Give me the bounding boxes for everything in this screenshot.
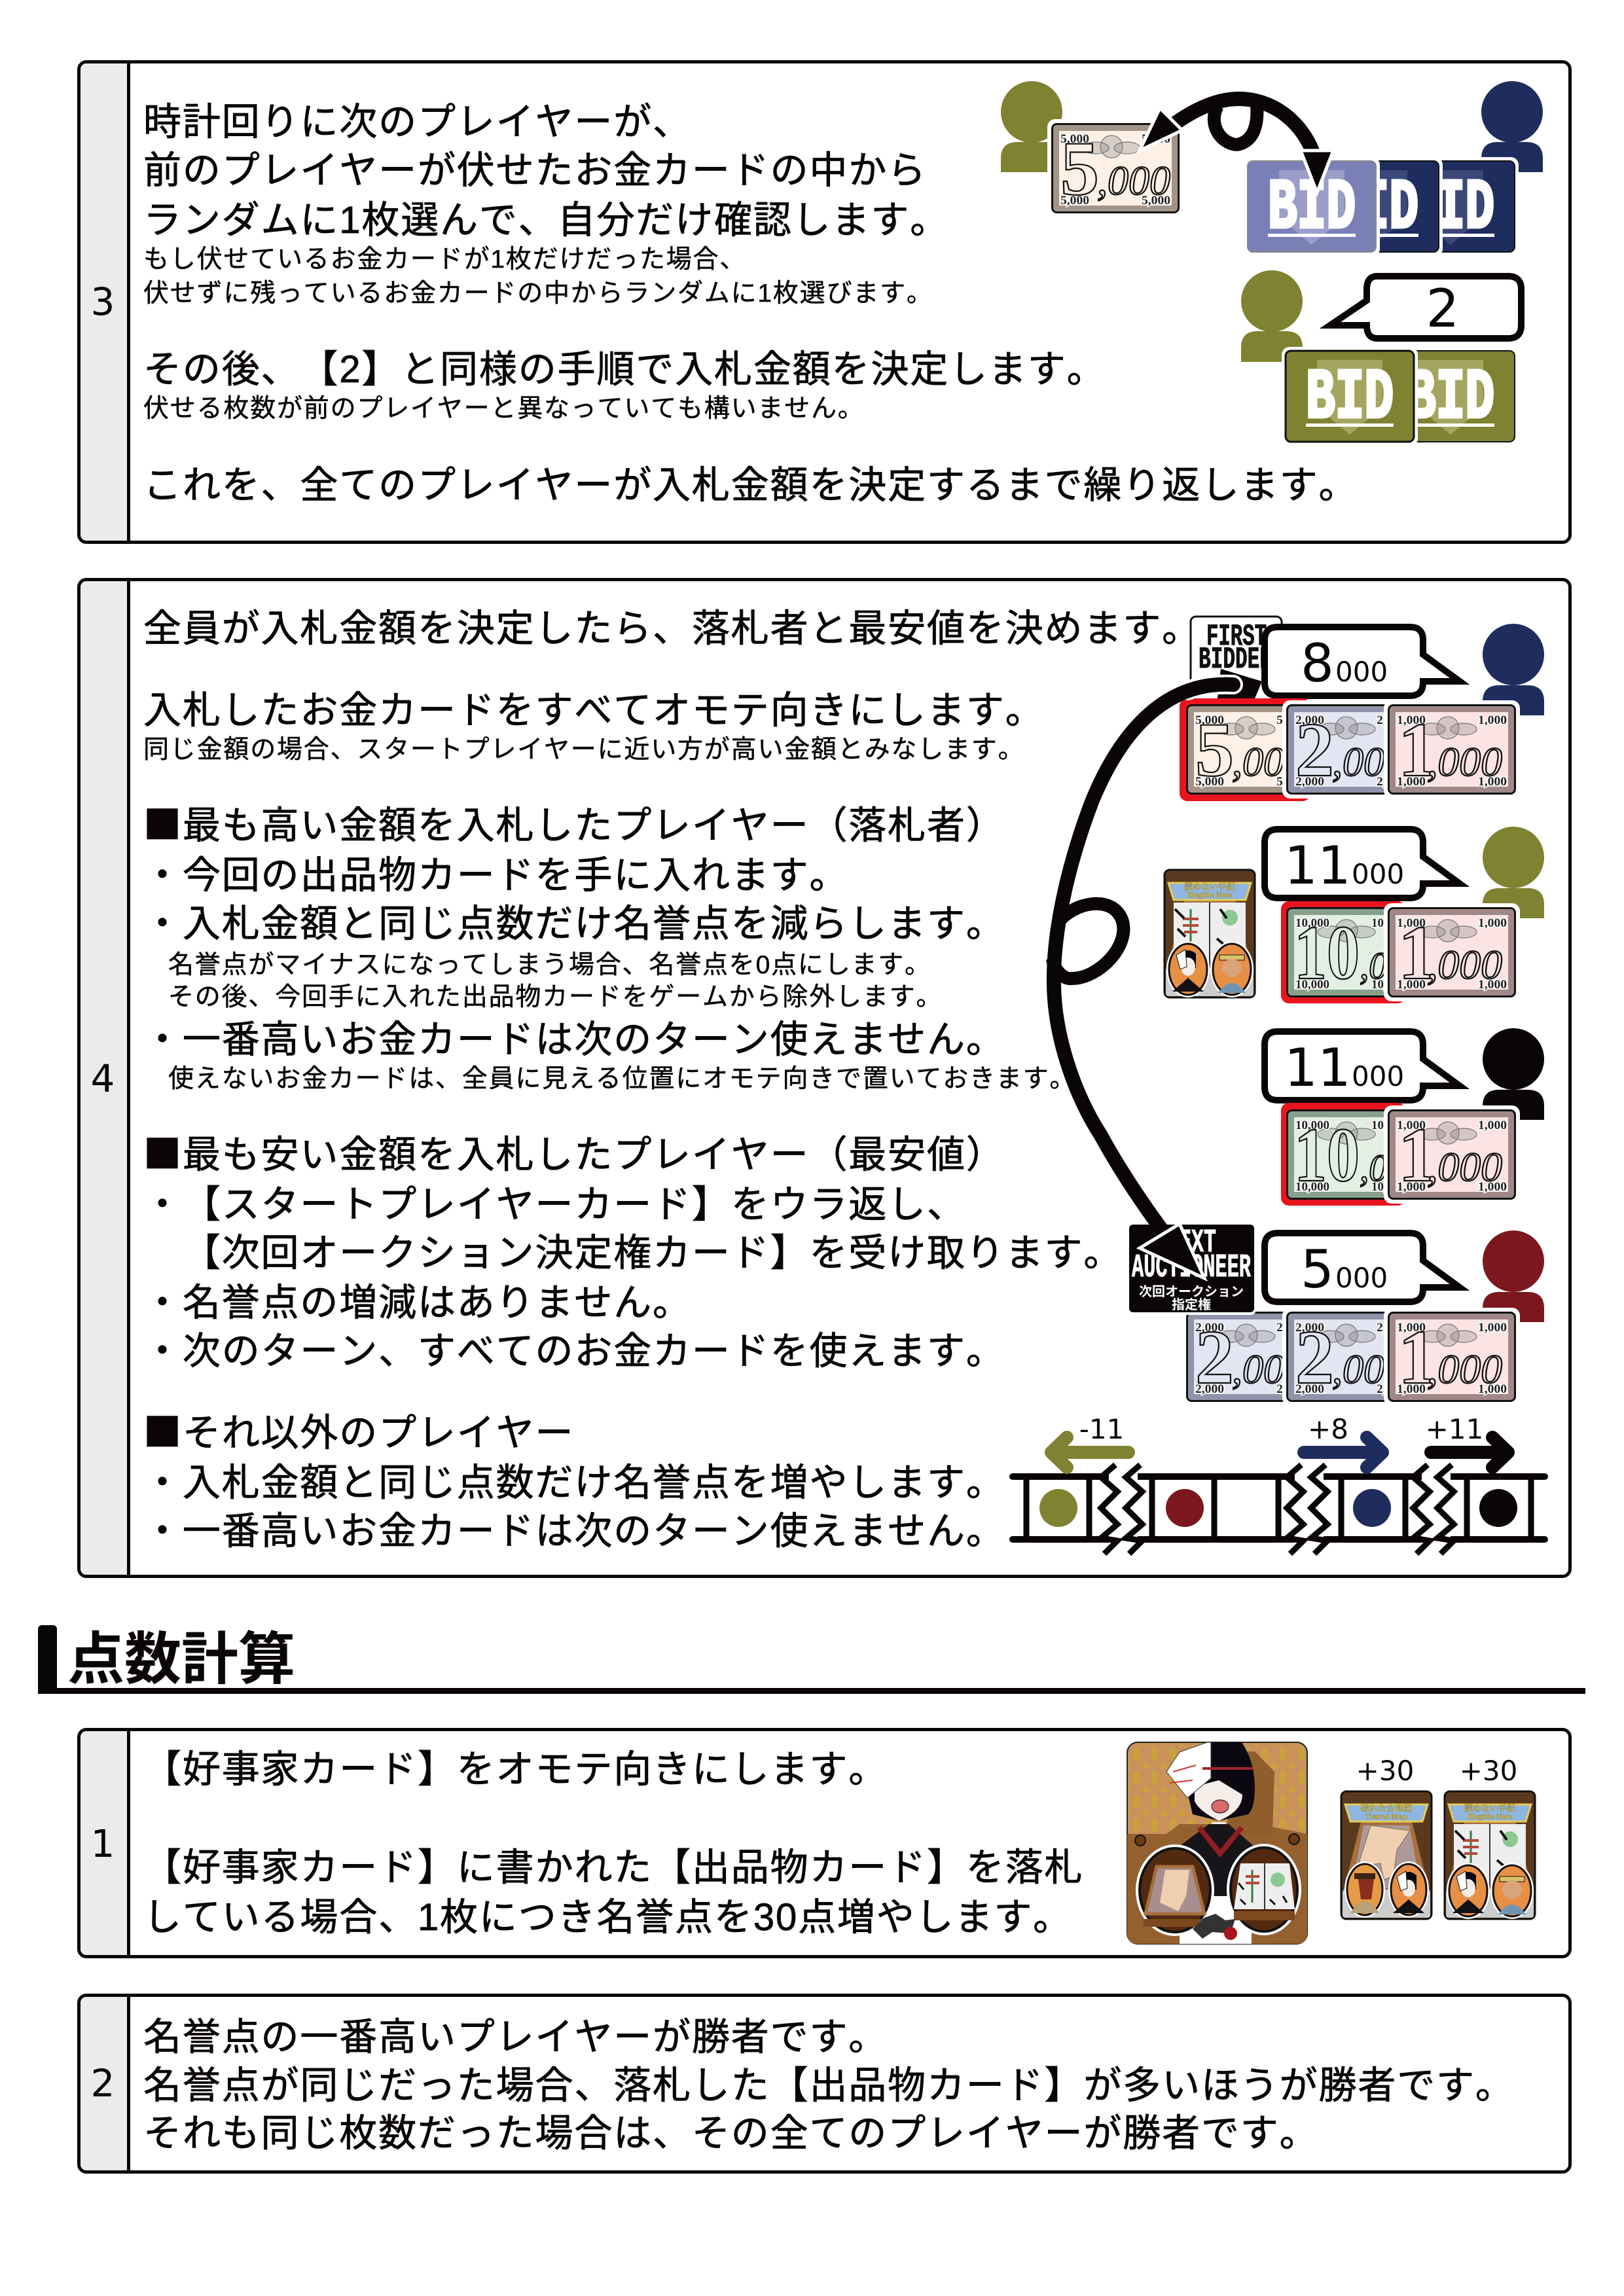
panel: step 3: 前のプレイヤーが伏せたお金カードの中から xyxy=(143,149,927,192)
panel: step 4: ・一番高いお金カードは次のターン使えません。 xyxy=(143,1510,1005,1552)
player row 3: black: ,000 xyxy=(1360,1147,1425,1189)
card: illegible note item: Illegible Note xyxy=(1468,1812,1513,1821)
panel: scoring step 1 xyxy=(77,1728,1572,1958)
player row 1: navy xyxy=(1180,624,1544,801)
player row 2: olive: 10,000 xyxy=(1295,978,1329,992)
money card 5000 xyxy=(1051,123,1180,213)
player row 1: navy: 5,000 xyxy=(1276,713,1305,727)
player row 3: black: 000 xyxy=(1352,1060,1404,1092)
card: selected light BID: BID xyxy=(1268,169,1356,249)
text block: reveal bids: 全員が入札金額を決定したら、落札者と最安値を決めます。 xyxy=(143,607,1201,650)
panel: scoring step 1: 【好事家カード】に書かれた【出品物カード】を落札 xyxy=(143,1846,1083,1889)
player row 2: olive: 10,000 xyxy=(1371,916,1405,930)
player row 4: dark red: 2,000 xyxy=(1276,1382,1305,1396)
player row 4: dark red: 2,000 xyxy=(1295,1382,1324,1396)
player row 4: dark red xyxy=(1187,1230,1544,1406)
player row 4: dark red: ,000 xyxy=(1427,1348,1502,1392)
player row 1: navy: 5,000 xyxy=(1195,713,1224,727)
text block: choose a card: 時計回りに次のプレイヤーが、 xyxy=(143,101,692,143)
player row 2: olive: 000 xyxy=(1352,858,1404,890)
text block: other players: ■それ以外のプレイヤー xyxy=(143,1402,574,1457)
panel: step 3 xyxy=(77,60,1572,544)
panel: step 4: その後、今回手に入れた出品物カードをゲームから除外します。 xyxy=(168,983,943,1011)
player row 4: dark red: 1,000 xyxy=(1478,1321,1507,1335)
player row 1: navy: 8 xyxy=(1301,633,1334,694)
panel: step 3: 伏せる枚数が前のプレイヤーと異なっていても構いません。 xyxy=(143,395,865,423)
money card 5000: 5,000 xyxy=(1142,132,1170,146)
player row 4: dark red: 5 xyxy=(1301,1239,1334,1300)
player row 2: olive: 1 xyxy=(1398,910,1437,996)
player row 2: olive: 11 xyxy=(1284,835,1351,896)
panel: scoring step 2: 名誉点が同じだった場合、落札した【出品物カード】が多いほうが勝者です。 xyxy=(143,2064,1515,2107)
player row 3: black: 1,000 xyxy=(1478,1119,1507,1132)
card: olive BID front: BID xyxy=(1306,359,1394,439)
panel: step 3: もし伏せているお金カードが1枚だけだった場合、 xyxy=(143,245,746,274)
panel: step 4: ・今回の出品物カードを手に入れます。 xyxy=(143,854,848,897)
icon: navy player xyxy=(1481,81,1543,172)
player row 4: dark red: 2,000 xyxy=(1377,1321,1405,1335)
player row 3: black: 1,000 xyxy=(1397,1180,1426,1194)
card: illegible note item xyxy=(1164,870,1255,997)
card: first bidder: BIDDER xyxy=(1199,643,1272,677)
card: navy BID back 2: BID xyxy=(1331,169,1418,249)
card: next auctioneer: NEXT xyxy=(1166,1225,1216,1262)
panel: step 4: ・入札金額と同じ点数だけ名誉点を増やします。 xyxy=(143,1462,1005,1504)
panel: step 4: ・一番高いお金カードは次のターン使えません。 xyxy=(143,1018,1005,1061)
step number 2: 2 xyxy=(91,2061,115,2106)
player row 1: navy: 2,000 xyxy=(1295,713,1324,727)
text block: highest bidder: ■最も高い金額を入札したプレイヤー（落札者） xyxy=(143,795,1005,850)
player row 2: olive: 1,000 xyxy=(1478,916,1507,930)
player row 1: navy: 5,000 xyxy=(1195,775,1224,789)
player row 1: navy: ,000 xyxy=(1232,740,1305,785)
arrow: -11 olive xyxy=(1051,1413,1128,1467)
player row 4: dark red: 2,000 xyxy=(1276,1321,1305,1335)
money card 5000: 5,000 xyxy=(1142,194,1170,207)
label: +30 right: +30 xyxy=(1460,1755,1517,1787)
card: navy BID back 2 xyxy=(1307,157,1443,257)
card: illegible note item: 読めない手記 xyxy=(1464,1803,1515,1813)
player row 4: dark red: 1 xyxy=(1398,1314,1437,1400)
player row 3: black: 10,000 xyxy=(1295,1119,1329,1132)
arrow: -11 olive: -11 xyxy=(1079,1413,1124,1445)
arrow: +8 navy: +8 xyxy=(1308,1413,1348,1445)
player row 1: navy: 5 xyxy=(1195,707,1234,793)
player row 2: olive: ,000 xyxy=(1360,944,1425,987)
player row 3: black: 1 xyxy=(1398,1112,1437,1198)
player row 3: black: ,000 xyxy=(1427,1145,1502,1190)
card: illegible note item xyxy=(1445,1791,1535,1919)
panel: scoring step 2 xyxy=(77,1994,1572,2174)
card: illegible note item: Illegible Note xyxy=(1187,890,1233,899)
card: teared map item: 破れた古地図 xyxy=(1361,1803,1412,1813)
arrow: curved double-headed swap xyxy=(1140,99,1333,192)
player row 4: dark red: 2,000 xyxy=(1377,1382,1405,1396)
panel: step 4 xyxy=(77,578,1572,1578)
player row 1: navy: 2,000 xyxy=(1377,775,1405,789)
step number 4: 4 xyxy=(91,1056,115,1101)
player row 1: navy: 1,000 xyxy=(1397,775,1426,789)
panel: step 4: 使えないお金カードは、全員に見える位置にオモテ向きで置いておきます。 xyxy=(168,1065,1076,1093)
card: next auctioneer xyxy=(1128,1223,1255,1314)
player row 2: olive: 1,000 xyxy=(1397,978,1426,992)
player row 1: navy: 1,000 xyxy=(1478,713,1507,727)
card: first bidder: FIRST xyxy=(1206,620,1267,654)
card: olive BID front xyxy=(1282,347,1418,446)
player row 2: olive xyxy=(1265,827,1544,1003)
card: next auctioneer: 指定権 xyxy=(1172,1294,1211,1313)
heading: score calculation: 点数計算 xyxy=(67,1628,295,1691)
score track xyxy=(1013,1465,1545,1554)
card: navy BID back 3 xyxy=(1382,157,1519,257)
arrow: +8 navy xyxy=(1304,1413,1382,1467)
player row 3: black: 10 xyxy=(1294,1112,1360,1198)
player row 4: dark red: 2 xyxy=(1295,1314,1334,1400)
player row 1: navy: ,000 xyxy=(1427,740,1502,785)
player row 4: dark red: 2,000 xyxy=(1295,1321,1324,1335)
player row 2: olive: 10,000 xyxy=(1295,916,1329,930)
label: +30 left: +30 xyxy=(1356,1755,1414,1787)
player row 4: dark red: 000 xyxy=(1335,1262,1388,1294)
player row 4: dark red: 1,000 xyxy=(1478,1382,1507,1396)
arrow: long curved bidder to next auctioneer xyxy=(1053,669,1262,1278)
icon: olive player bottom xyxy=(1241,270,1303,362)
panel: step 4: ・名誉点の増減はありません。 xyxy=(143,1282,692,1324)
card: next auctioneer: AUCTIONEER xyxy=(1132,1249,1251,1287)
speech bubble: 2: 2 xyxy=(1426,278,1459,339)
panel: scoring step 2: それも同じ枚数だった場合は、その全てのプレイヤーが勝者です。 xyxy=(143,2112,1319,2155)
panel: step 4: 名誉点がマイナスになってしまう場合、名誉点を0点にします。 xyxy=(168,951,931,979)
arrow: +11 black: +11 xyxy=(1426,1413,1483,1445)
panel: step 4: ・次のターン、すべてのお金カードを使えます。 xyxy=(143,1330,1005,1372)
player row 1: navy: 2,000 xyxy=(1377,713,1405,727)
money card 5000: 5,000 xyxy=(1060,132,1089,146)
illustration: card exchange xyxy=(1001,81,1543,442)
player row 1: navy: 1,000 xyxy=(1397,713,1426,727)
illustration: bids and score track xyxy=(1009,615,1548,1556)
panel: step 3: これを、全てのプレイヤーが入札金額を決定するまで繰り返します。 xyxy=(143,464,1358,507)
player row 3: black: 10,000 xyxy=(1371,1119,1405,1132)
card: teared map item: Teared Map xyxy=(1365,1812,1407,1821)
player row 1: navy: 1,000 xyxy=(1478,775,1507,789)
player row 1: navy: 1 xyxy=(1398,707,1437,793)
player row 4: dark red: 1,000 xyxy=(1397,1321,1426,1335)
player row 4: dark red: ,000 xyxy=(1332,1348,1405,1392)
card: selected light BID xyxy=(1244,157,1380,257)
player row 4: dark red: 2,000 xyxy=(1195,1321,1224,1335)
money card 5000: 5 xyxy=(1060,126,1099,211)
player row 3: black: 1,000 xyxy=(1397,1119,1426,1132)
card: navy BID back 3: BID xyxy=(1407,169,1494,249)
step number 1: 1 xyxy=(91,1821,115,1866)
player row 1: navy: 000 xyxy=(1335,656,1388,688)
arrow: +11 black xyxy=(1426,1413,1508,1467)
text block: collector card: 【好事家カード】をオモテ向きにします。 xyxy=(143,1748,888,1791)
money card 5000: ,000 xyxy=(1097,159,1170,204)
player row 2: olive: 1,000 xyxy=(1397,916,1426,930)
panel: scoring step 1: している場合、1枚につき名誉点を30点増やします。 xyxy=(143,1896,1072,1939)
heading: score calculation xyxy=(38,1625,1585,1694)
player row 1: navy: ,000 xyxy=(1332,740,1405,785)
player row 4: dark red: 2 xyxy=(1195,1314,1234,1400)
card: olive BID back xyxy=(1382,347,1519,446)
player row 1: navy: 2 xyxy=(1295,707,1334,793)
step number 3: 3 xyxy=(91,279,115,324)
player row 1: navy: 2,000 xyxy=(1295,775,1324,789)
illustration: collector and item cards xyxy=(1127,1742,1536,1945)
card: teared map item xyxy=(1341,1791,1432,1919)
player row 3: black: 10,000 xyxy=(1371,1180,1405,1194)
speech bubble: 2 xyxy=(1330,276,1521,339)
player row 3: black xyxy=(1265,1028,1544,1206)
panel: step 4: 入札したお金カードをすべてオモテ向きにします。 xyxy=(143,689,1045,732)
player row 3: black: 10,000 xyxy=(1295,1180,1329,1194)
player row 3: black: 1,000 xyxy=(1478,1180,1507,1194)
icon: olive player top xyxy=(1001,81,1062,172)
panel: step 3: ランダムに1枚選んで、自分だけ確認します。 xyxy=(143,199,949,242)
player row 3: black: 11 xyxy=(1284,1037,1351,1098)
player row 4: dark red: ,000 xyxy=(1232,1348,1305,1392)
player row 4: dark red: 1,000 xyxy=(1397,1382,1426,1396)
panel: step 3: 伏せずに残っているお金カードの中からランダムに1枚選びます。 xyxy=(143,279,933,308)
player row 2: olive: ,000 xyxy=(1427,943,1502,988)
panel: step 4: ・入札金額と同じ点数だけ名誉点を減らします。 xyxy=(143,903,1005,945)
player row 1: navy: 5,000 xyxy=(1276,775,1305,789)
text block: lowest bidder: ■最も安い金額を入札したプレイヤー（最安値） xyxy=(143,1124,1005,1179)
panel: step 4: 同じ金額の場合、スタートプレイヤーに近い方が高い金額とみなします。 xyxy=(143,736,1024,764)
card: next auctioneer: 次回オークション xyxy=(1139,1281,1244,1300)
card: olive BID back: BID xyxy=(1407,359,1494,439)
card: first bidder xyxy=(1191,617,1282,705)
card: illegible note item: 読めない手記 xyxy=(1184,882,1235,891)
panel: step 4: ・【スタートプレイヤーカード】をウラ返し、 xyxy=(143,1183,966,1226)
panel: step 4: 【次回オークション決定権カード】を受け取ります。 xyxy=(183,1232,1123,1274)
player row 4: dark red: 2,000 xyxy=(1195,1382,1224,1396)
player row 2: olive: 10,000 xyxy=(1371,978,1405,992)
card: collector xyxy=(1127,1742,1307,1944)
player row 2: olive: 1,000 xyxy=(1478,978,1507,992)
money card 5000: 5,000 xyxy=(1060,194,1089,207)
player row 2: olive: 10 xyxy=(1294,910,1360,996)
panel: step 3: その後、【2】と同様の手順で入札金額を決定します。 xyxy=(143,348,1106,391)
text block: winner: 名誉点の一番高いプレイヤーが勝者です。 xyxy=(143,2016,888,2058)
